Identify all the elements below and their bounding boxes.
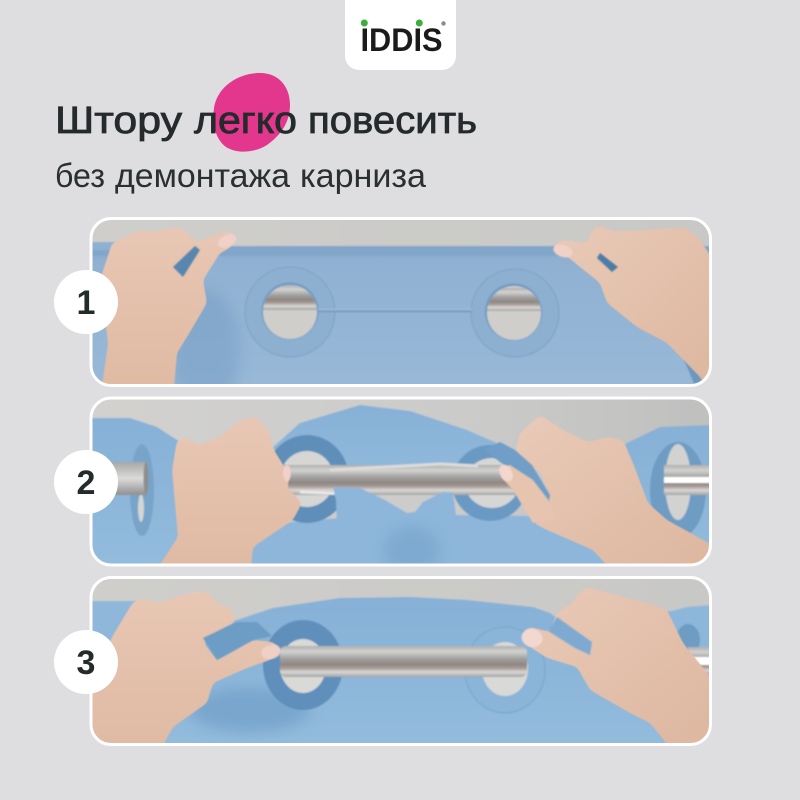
panel 2 frame: [91, 398, 710, 565]
center arch: [273, 404, 498, 466]
right curtain: [625, 424, 709, 544]
right hand: [520, 588, 709, 743]
fabric shadow left: [176, 292, 240, 384]
title: Штору: [55, 100, 182, 142]
left hand: [92, 591, 282, 743]
flap of curtain with wave edge: [332, 486, 456, 519]
rod: [280, 465, 525, 495]
subtitle: демонтажа: [115, 157, 291, 194]
infographic canvas: [54, 0, 712, 746]
right hand: [494, 416, 709, 564]
lower cloth: [251, 514, 606, 564]
step badge 1: [54, 270, 118, 334]
subtitle: карниза: [300, 157, 427, 194]
left curtain: [90, 418, 180, 566]
pink blob accent: [213, 73, 290, 152]
step badge 1: 1: [77, 284, 95, 322]
step badge 3: 3: [77, 644, 95, 682]
title: легко: [194, 100, 297, 142]
title: повесить: [308, 100, 477, 142]
fabric fold shade: [386, 528, 438, 564]
right hand: [552, 226, 709, 380]
step badge 3: [54, 630, 118, 694]
panel 2 photo: curtain pulled over the rod: [92, 400, 709, 564]
logo wordmark: IDDIS: [360, 22, 442, 58]
panel 3 frame: [91, 578, 710, 744]
subtitle: без: [55, 157, 105, 194]
step badge 2: 2: [77, 464, 95, 502]
left hand: [102, 228, 237, 384]
panel 3 photo: curtain threaded on the rod: [92, 579, 709, 743]
logo plate: [345, 0, 456, 70]
step badge 2: [54, 450, 118, 514]
panel 1 photo: curtain with eyelets, hands at top edge: [92, 220, 709, 384]
fabric shadow: [190, 688, 310, 732]
panel 1 frame: [91, 218, 710, 386]
left hand: [160, 418, 301, 564]
